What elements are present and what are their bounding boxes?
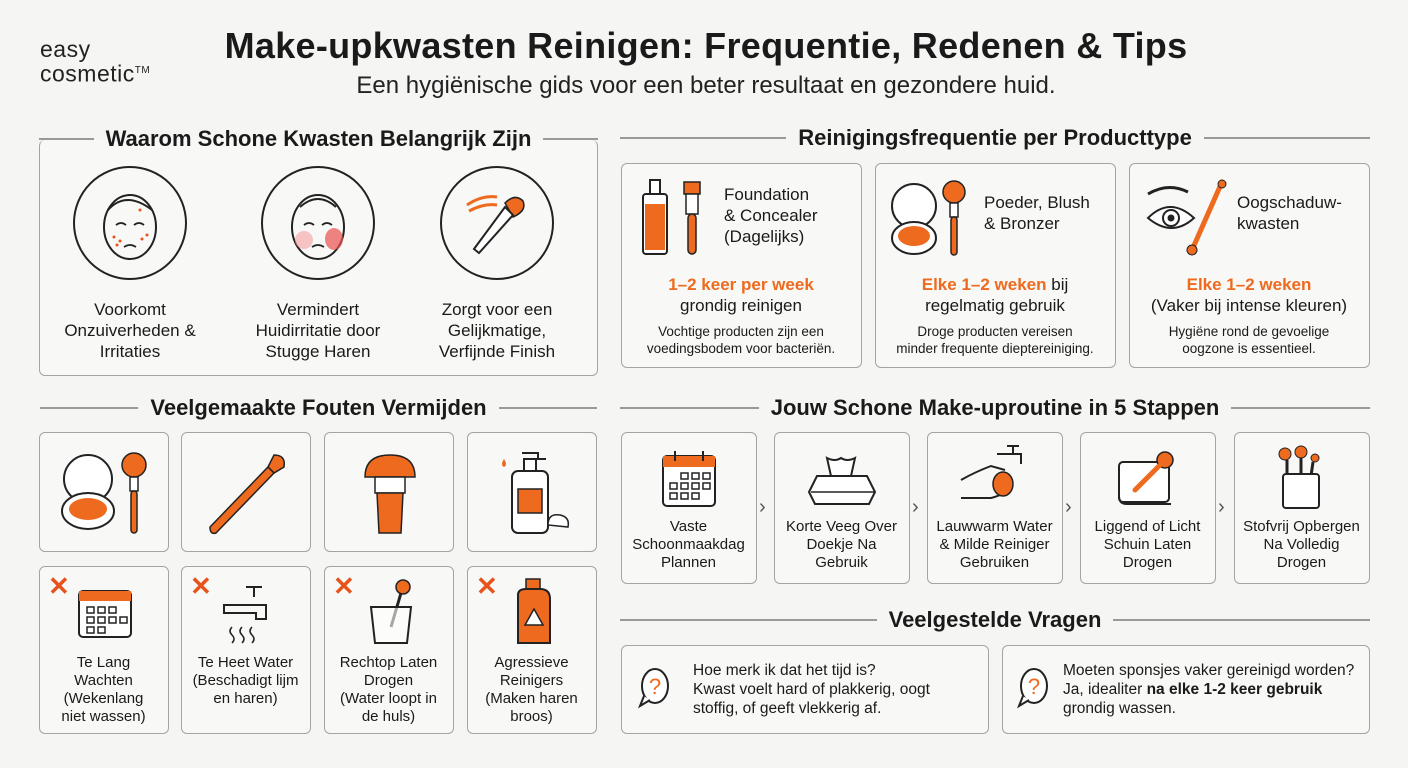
heading: mistakes: Veelgemaakte Fouten Vermijden [150, 395, 487, 420]
text: eyeshadow frequency [1151, 275, 1347, 315]
text: step labels: Gebruiken [960, 554, 1029, 571]
panel: mistake te lang wachten [39, 566, 169, 734]
text: powder frequency [922, 275, 1068, 315]
icon: kabuki brush [324, 432, 454, 552]
text: powder note: minder frequente dieptereiniging. [896, 341, 1094, 356]
icon: brush in cup [370, 579, 412, 644]
text: foundation frequency [668, 275, 814, 315]
icon: calendar [78, 590, 132, 638]
text: step labels: Doekje Na [806, 536, 877, 553]
text: step labels: Na Volledig [1264, 536, 1339, 553]
icon: question bubble [1017, 668, 1048, 708]
text: vermindert: Vermindert [277, 300, 359, 319]
text: step labels [632, 518, 1360, 571]
icon: brush finish [440, 166, 554, 280]
icon: step4 towel brush [1118, 451, 1174, 505]
icon: step2 wipes [808, 456, 876, 505]
text: te lang wachten: (Wekenlang [64, 690, 143, 707]
text: eyeshadow frequency: Elke 1–2 weken [1187, 275, 1311, 294]
text: vermindert: Stugge Haren [266, 342, 370, 361]
text: step labels: & Milde Reiniger [939, 536, 1050, 553]
text: powder label: & Bronzer [984, 214, 1060, 233]
text: te lang wachten [61, 654, 146, 725]
text: step labels: Schoonmaakdag [632, 536, 745, 553]
text: te lang wachten: Wachten [74, 672, 133, 689]
text: eyeshadow frequency: (Vaker bij intense kleuren) [1151, 296, 1347, 315]
text: eyeshadow note [1169, 324, 1329, 356]
text: step labels: Vaste [670, 518, 707, 535]
text: foundation label: Foundation [724, 185, 809, 204]
text: te lang wachten: niet wassen) [61, 708, 146, 725]
text: step labels: Gebruik [815, 554, 868, 571]
text: faq 2: Ja, idealiter na elke 1-2 keer gebruik [1063, 681, 1322, 698]
text: foundation label: & Concealer [724, 206, 818, 225]
text: agressieve reinigers [485, 654, 578, 725]
title: Make-upkwasten Reinigen: Frequentie, Redenen & Tips [225, 25, 1187, 66]
icon: foundation bottle and brush [642, 179, 701, 255]
text: step labels: Stofvrij Opbergen [1243, 518, 1360, 535]
text: faq 1: Kwast voelt hard of plakkerig, oogt [693, 681, 930, 698]
logo: easy [40, 36, 91, 62]
panel: mistake rechtop drogen [324, 566, 454, 734]
text: rechtop drogen: Rechtop Laten [340, 654, 437, 671]
text: eyeshadow note: Hygiëne rond de gevoelige [1169, 324, 1329, 339]
icon: question bubble: ? [649, 674, 661, 699]
text: vermindert: Huidirritatie door [256, 321, 380, 340]
text: eyeshadow label [1237, 193, 1342, 233]
icon: eye and brush [1146, 180, 1226, 256]
icon: long brush [181, 432, 311, 552]
text: step labels: Lauwwarm Water [936, 518, 1053, 535]
panel: mistake rechtop drogen: ✕ [333, 571, 355, 601]
panel: mistake te heet water [181, 566, 311, 734]
text: foundation frequency: 1–2 keer per week [668, 275, 814, 294]
text: powder note: Droge producten vereisen [917, 324, 1073, 339]
heading: why: Waarom Schone Kwasten Belangrijk Zijn [106, 126, 531, 151]
text: foundation frequency: grondig reinigen [680, 296, 802, 315]
icon: step1 calendar [662, 451, 716, 507]
text: agressieve reinigers: (Maken haren [485, 690, 578, 707]
panel: mistake images [39, 432, 597, 552]
icon: question bubble [638, 668, 669, 708]
text: rechtop drogen: Drogen [364, 672, 413, 689]
panel: mistake te lang wachten: ✕ [48, 571, 70, 601]
text: agressieve reinigers: Reinigers [500, 672, 563, 689]
text: te heet water [193, 654, 298, 707]
panel: foundation card [621, 163, 862, 368]
text: vermindert [256, 300, 380, 361]
text: rechtop drogen: de huls) [362, 708, 415, 725]
arrows: step chevrons: › [759, 496, 766, 518]
text: powder note [896, 324, 1094, 356]
subtitle: Een hygiënische gids voor een beter resultaat en gezondere huid. [356, 72, 1056, 99]
panel: routine steps [621, 432, 1370, 584]
text: te heet water: Te Heet Water [198, 654, 293, 671]
logo: cosmeticTM [40, 61, 150, 87]
text: voorkomt: Voorkomt [94, 300, 166, 319]
panel: faq 2 [1002, 645, 1370, 734]
text: te heet water: en haren) [213, 690, 278, 707]
icon: detergent bottle [517, 578, 551, 644]
text: faq 1 [693, 662, 930, 717]
text: foundation label: (Dagelijks) [724, 227, 804, 246]
text: te lang wachten: Te Lang [77, 654, 130, 671]
text: agressieve reinigers: Agressieve [494, 654, 569, 671]
icon: tap hot water [223, 586, 267, 644]
panel: mistake te heet water: ✕ [190, 571, 212, 601]
icon: face irritation [261, 166, 375, 280]
text: foundation label [724, 185, 818, 246]
text: eyeshadow label: kwasten [1237, 214, 1299, 233]
text: faq 1: stoffig, of geeft vlekkerig af. [693, 700, 881, 717]
icon: face acne [73, 166, 187, 280]
text: powder frequency: Elke 1–2 weken bij [922, 275, 1068, 294]
text: rechtop drogen: (Water loopt in [340, 690, 437, 707]
panel: mistake agressieve reinigers [467, 566, 597, 734]
text: voorkomt: Onzuiverheden & [64, 321, 196, 340]
text: step labels: Drogen [1123, 554, 1172, 571]
text: faq 2: grondig wassen. [1063, 700, 1176, 717]
text: zorgt: Zorgt voor een [442, 300, 552, 319]
panel: powder card [875, 163, 1116, 368]
text: step labels: Korte Veeg Over [786, 518, 897, 535]
text: rechtop drogen [340, 654, 437, 725]
heading: frequency: Reinigingsfrequentie per Producttype [798, 125, 1192, 150]
arrows: step chevrons: › [1065, 496, 1072, 518]
text: step labels: Liggend of Licht [1095, 518, 1200, 535]
text: voorkomt: Irritaties [100, 342, 160, 361]
text: powder label [984, 193, 1090, 233]
text: powder label: Poeder, Blush [984, 193, 1090, 212]
text: step labels: Drogen [1277, 554, 1326, 571]
text: step labels: Schuin Laten [1104, 536, 1191, 553]
arrows: step chevrons [759, 496, 1225, 518]
arrows: step chevrons: › [1218, 496, 1225, 518]
text: foundation note: voedingsbodem voor bacteriën. [647, 341, 835, 356]
text: step labels: Plannen [661, 554, 716, 571]
panel: faq 1 [621, 645, 989, 734]
text: zorgt [439, 300, 555, 361]
text: zorgt: Gelijkmatige, [448, 321, 546, 340]
icon: step3 hands washing [960, 445, 1022, 499]
arrows: step chevrons: › [912, 496, 919, 518]
icon: soap bottle [467, 432, 597, 552]
text: faq 1: Hoe merk ik dat het tijd is? [693, 662, 876, 679]
text: powder frequency: regelmatig gebruik [925, 296, 1065, 315]
logo [40, 36, 150, 87]
text: zorgt: Verfijnde Finish [439, 342, 555, 361]
icon: step5 cup of brushes [1278, 446, 1320, 509]
text: foundation note: Vochtige producten zijn een [658, 324, 824, 339]
panel: why clean brushes [39, 126, 598, 376]
text: foundation note [647, 324, 835, 356]
text: te heet water: (Beschadigt lijm [193, 672, 298, 689]
heading: faq: Veelgestelde Vragen [889, 607, 1101, 632]
text: faq 2 [1063, 661, 1354, 718]
heading: routine: Jouw Schone Make-uproutine in 5 Stappen [771, 395, 1219, 420]
icon: question bubble: ? [1028, 674, 1040, 699]
text: eyeshadow label: Oogschaduw- [1237, 193, 1342, 212]
panel: mistake agressieve reinigers: ✕ [476, 571, 498, 601]
text: voorkomt [64, 300, 196, 361]
panel: eyeshadow card [1129, 163, 1370, 368]
icon: compact and brush [891, 180, 966, 256]
text: agressieve reinigers: broos) [510, 708, 553, 725]
text: eyeshadow note: oogzone is essentieel. [1182, 341, 1316, 356]
icon: compact brush [39, 432, 169, 552]
text: faq 2: Moeten sponsjes vaker gereinigd worden? [1063, 662, 1354, 679]
